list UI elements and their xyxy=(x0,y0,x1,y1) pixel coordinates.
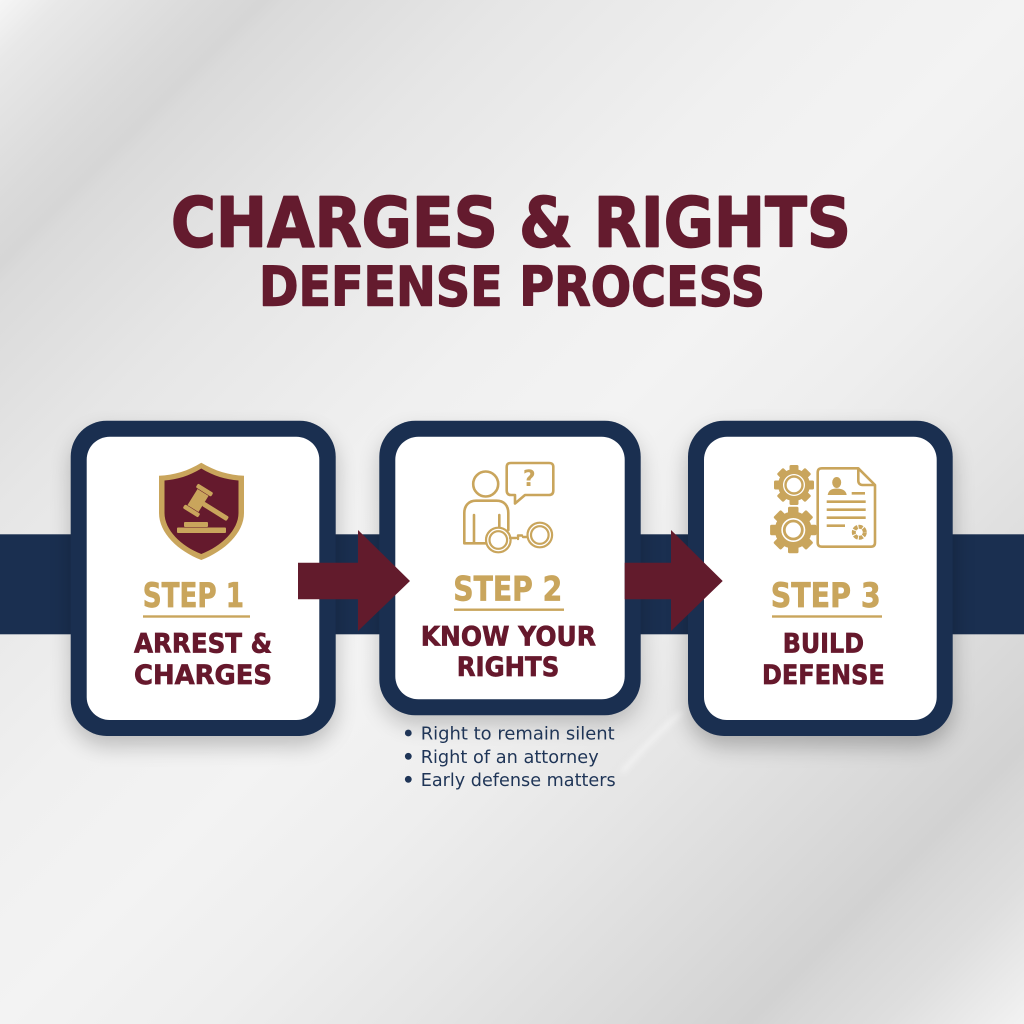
connector band xyxy=(0,534,1024,634)
step 2 name: RIGHTS xyxy=(457,652,559,683)
step 3 name xyxy=(762,628,885,691)
panel: step 1 xyxy=(71,421,336,746)
title: CHARGES & RIGHTS xyxy=(171,184,851,264)
icon: shield with gavel xyxy=(159,463,244,560)
panel: step 2 xyxy=(379,421,641,725)
step 1 underline xyxy=(143,615,250,618)
icon: gears and document xyxy=(770,465,875,553)
step 2 name xyxy=(421,621,596,683)
panel: step 3 xyxy=(688,421,953,746)
icon: question mark: ? xyxy=(523,467,536,492)
bullet list: rights: Right of an attorney xyxy=(421,747,599,768)
arrow: step 2 to step 3 xyxy=(625,530,723,631)
step 2 label: STEP 2 xyxy=(453,570,562,608)
title xyxy=(171,184,851,318)
arrow: step 1 to step 2 xyxy=(298,530,410,631)
gear bottom xyxy=(770,507,816,553)
step 2 name: KNOW YOUR xyxy=(421,621,596,652)
step 2 underline xyxy=(454,608,564,611)
icon: person, question bubble and handcuffs xyxy=(464,463,553,552)
bullet list: rights: Early defense matters xyxy=(421,770,616,791)
step 3 name: BUILD xyxy=(783,628,864,660)
bullet list: rights xyxy=(405,724,616,791)
bullet list: rights: Right to remain silent xyxy=(421,724,615,745)
step 1 name xyxy=(134,628,272,691)
step 3 label: STEP 3 xyxy=(771,576,881,615)
step 1 name: ARREST & xyxy=(134,628,272,660)
step 3 name: DEFENSE xyxy=(762,660,885,691)
gear top xyxy=(774,465,814,505)
subtitle: DEFENSE PROCESS xyxy=(259,256,765,318)
step 1 name: CHARGES xyxy=(134,660,272,691)
document xyxy=(818,468,875,547)
step 3 underline xyxy=(772,615,882,618)
step 1 label: STEP 1 xyxy=(143,576,244,615)
